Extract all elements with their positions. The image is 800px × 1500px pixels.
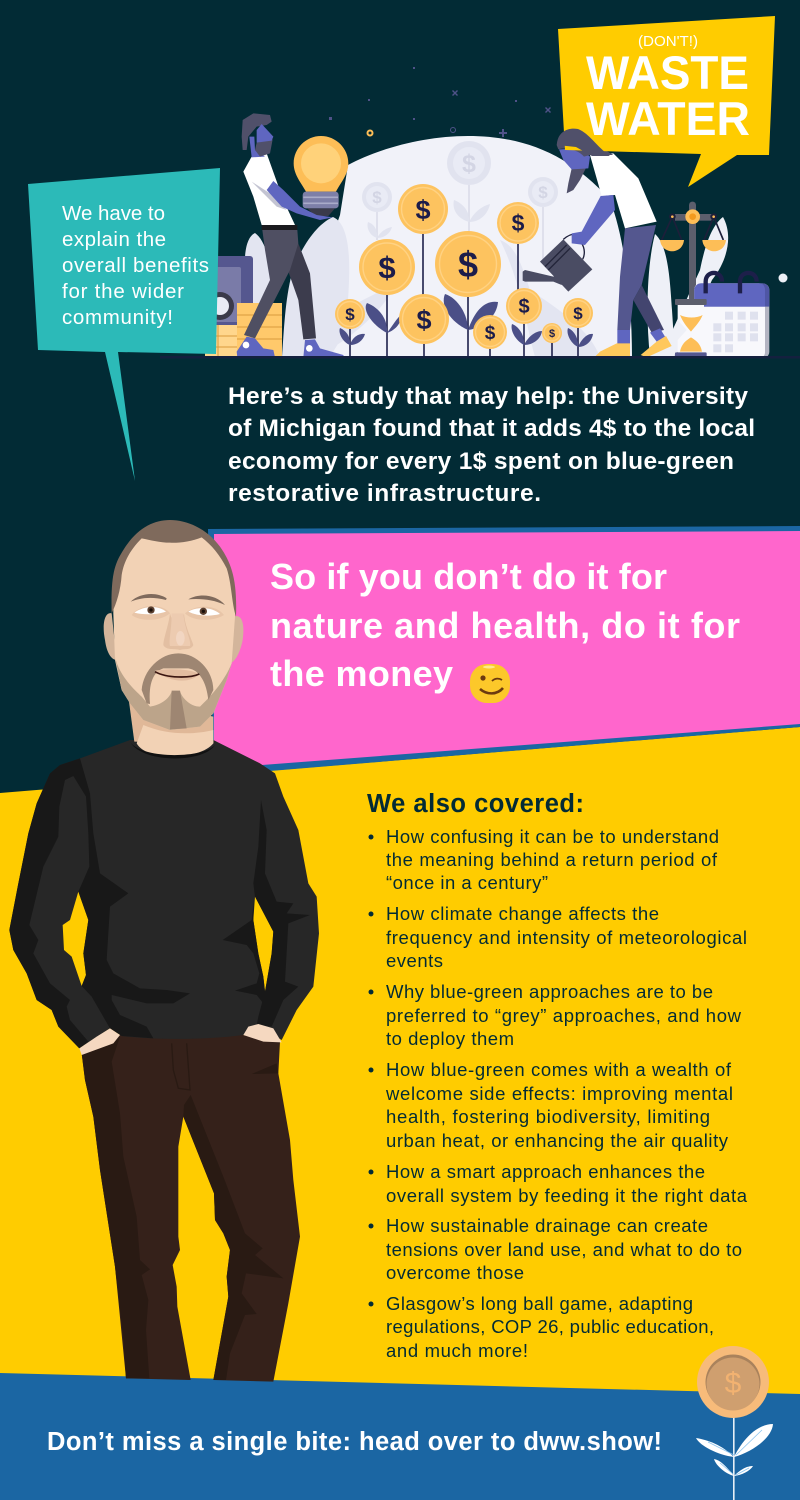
gold coins: $ [518, 296, 530, 318]
gold coins: $ [416, 305, 432, 335]
illustration: money garden [160, 67, 800, 358]
bullet list [368, 826, 748, 1361]
gold coins: $ [573, 304, 583, 323]
gold coins: $ [345, 305, 355, 324]
plant stems and leaves [339, 234, 593, 357]
bullet list: How blue-green comes with a wealth of [386, 1059, 732, 1080]
person with lightbulb [237, 113, 348, 357]
bullet list: Why blue-green approaches are to be [386, 981, 713, 1002]
callout: teal speech bubble [28, 168, 220, 481]
grey background coins [362, 141, 558, 260]
dome background [290, 136, 632, 357]
text block: study: restorative infrastructure. [228, 480, 541, 507]
panel: blue footer band [0, 1373, 800, 1500]
hourglass [675, 299, 707, 358]
bullet list: the meaning behind a return period of [386, 849, 718, 870]
bullet list: “once in a century” [386, 872, 548, 893]
gold coins: $ [415, 195, 431, 225]
bullet list: How climate change affects the [386, 903, 659, 924]
bullet list: tensions over land use, and what to do to [386, 1239, 742, 1260]
large leaf [282, 217, 349, 357]
icon: coin plant [696, 1346, 773, 1500]
grey background coins: $ [462, 150, 476, 178]
bullet list: frequency and intensity of meteorological [386, 927, 747, 948]
gold coins: $ [378, 250, 396, 285]
text block: we also covered [367, 790, 748, 1361]
headline: the money [270, 653, 453, 694]
headline [270, 556, 740, 694]
callout text: explain the [62, 228, 166, 251]
white dot [778, 274, 788, 282]
hands [79, 1024, 282, 1055]
callout text: community! [62, 306, 173, 329]
person watering with can [523, 129, 672, 357]
subheading: We also covered: [367, 790, 584, 818]
bullet list: How a smart approach enhances the [386, 1161, 705, 1182]
bullet list: to deploy them [386, 1028, 514, 1049]
gold coins [335, 184, 593, 349]
gold coins: $ [458, 244, 478, 285]
bullet list: overcome those [386, 1262, 524, 1283]
calendar [694, 273, 769, 358]
lightbulb [294, 136, 348, 216]
sweater [9, 740, 319, 1055]
person overlap: hair over bubble [557, 129, 610, 156]
text block: study: economy for every 1$ spent on blue-green [228, 448, 734, 475]
gold coins: $ [512, 210, 525, 236]
balance scale [660, 202, 726, 302]
watering can [523, 234, 592, 292]
callout text: We have to [62, 202, 165, 225]
text block: study: of Michigan found that it adds 4$ to the local [228, 415, 755, 442]
title text: (DON'T!) [638, 34, 698, 50]
headline: nature and health, do it for [270, 605, 740, 646]
head [104, 520, 243, 758]
callout text [62, 202, 209, 329]
bullet list: How sustainable drainage can create [386, 1215, 708, 1236]
bullet list: regulations, COP 26, public education, [386, 1316, 714, 1337]
bullet list: overall system by feeding it the right data [386, 1185, 748, 1206]
panel: pink headline [208, 526, 800, 771]
grey background coins: $ [372, 188, 382, 207]
bullet list: events [386, 950, 443, 971]
ground line [160, 356, 800, 358]
trousers [82, 1035, 300, 1382]
bullet list: health, fostering biodiversity, limiting [386, 1106, 710, 1127]
callout text: for the wider [62, 280, 184, 303]
gold coins: $ [549, 328, 555, 340]
title: yellow speech bubble [558, 16, 775, 187]
title text [586, 34, 750, 145]
lower leaves [285, 240, 600, 357]
safe and gold stacks [196, 256, 282, 357]
title text: WATER [586, 92, 750, 145]
person: presenter [9, 520, 319, 1382]
callout text: overall benefits [62, 254, 209, 277]
footer call to action: Don’t miss a single bite: head over to dww.show! [47, 1428, 662, 1456]
text block: study: Here’s a study that may help: the University [228, 383, 748, 410]
background leaves [245, 217, 728, 357]
bullet list: How confusing it can be to understand [386, 826, 719, 847]
icon: coin plant: $ [725, 1367, 742, 1400]
bullet list: Glasgow’s long ball game, adapting [386, 1293, 693, 1314]
bullet list: preferred to “grey” approaches, and how [386, 1005, 742, 1026]
icon: winking emoji [470, 664, 510, 703]
bullet list: welcome side effects: improving mental [385, 1083, 733, 1104]
headline: So if you don’t do it for [270, 556, 667, 597]
title text: WASTE [586, 46, 749, 99]
panel: yellow section background [0, 727, 800, 1400]
bullet list: urban heat, or enhancing the air quality [386, 1130, 729, 1151]
grey background coins: $ [538, 183, 548, 202]
stars and sparkles [329, 67, 551, 170]
gold coins: $ [485, 323, 496, 344]
text block: study [228, 383, 755, 507]
bullet list: and much more! [386, 1340, 528, 1361]
